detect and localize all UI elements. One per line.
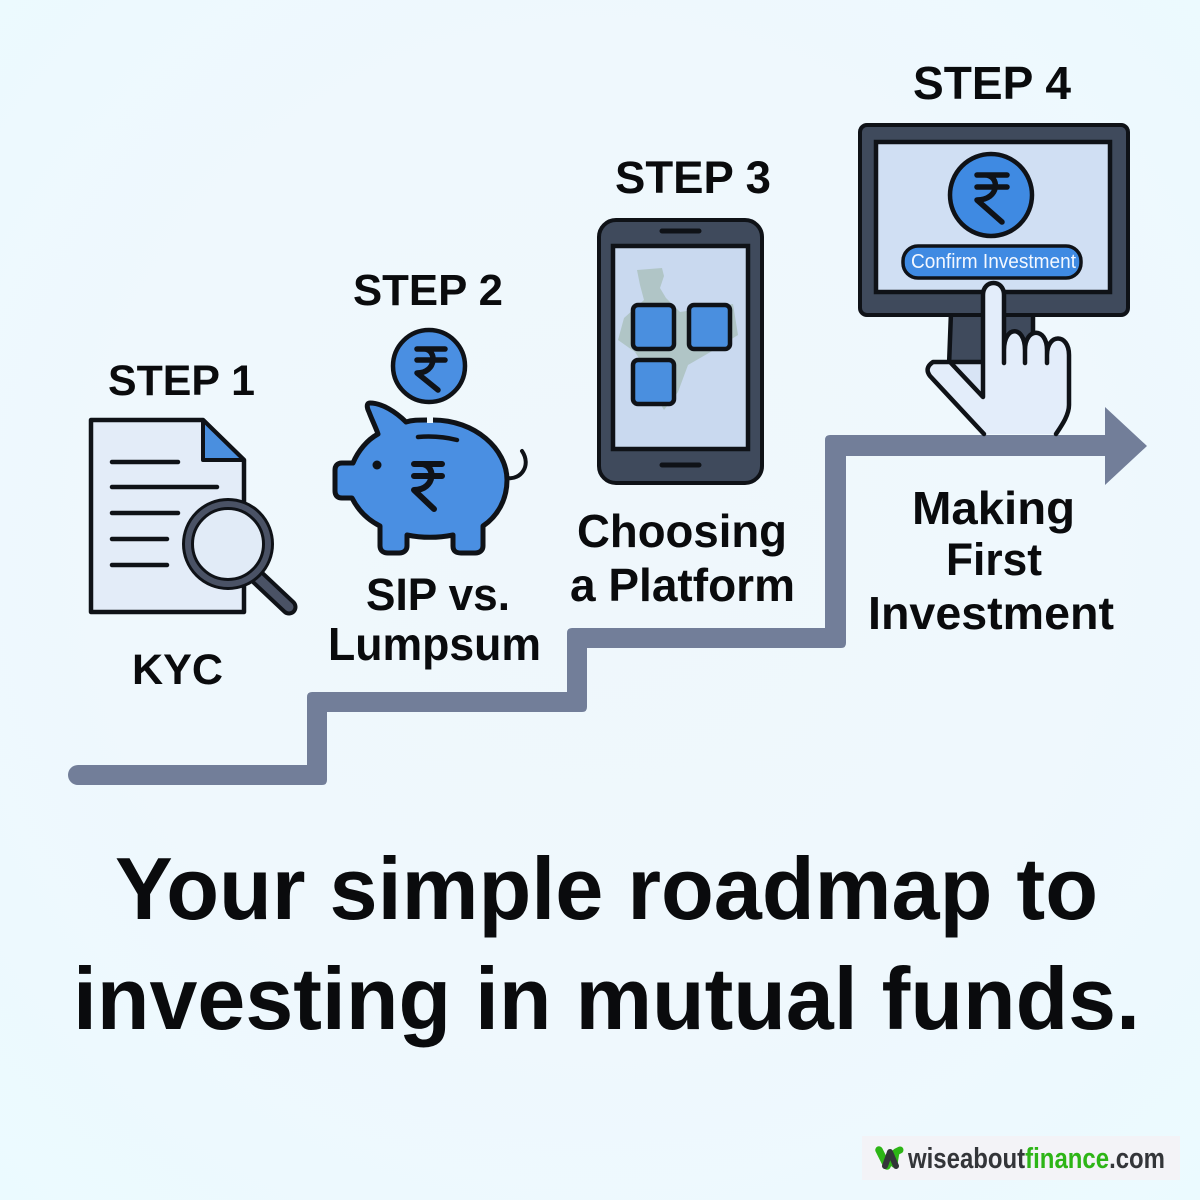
heading: step 3: STEP 3: [615, 152, 771, 203]
icon: pointing hand: [928, 283, 1069, 434]
label: SIP vs. Lumpsum: [328, 569, 541, 670]
heading: step 4: STEP 4: [913, 57, 1071, 109]
title: Your simple roadmap to: [115, 839, 1098, 938]
step 4: making first investment: [860, 57, 1128, 639]
heading: step 1: STEP 1: [108, 357, 255, 405]
label: making first investment: [868, 482, 1114, 639]
icon: document with magnifying glass: [91, 420, 289, 612]
label: making first investment: First: [946, 534, 1042, 585]
step 2: SIP vs lumpsum: [328, 266, 541, 670]
label: SIP vs. Lumpsum: SIP vs.: [366, 569, 510, 620]
staircase arrow: [68, 407, 1147, 785]
icon: monitor with confirm button: Confirm Investment: [911, 251, 1076, 273]
icon: smartphone with app tiles: [599, 220, 762, 483]
label: choosing a platform: [570, 505, 795, 611]
logo: wiseaboutfinance.com: wiseaboutfinance.com: [907, 1143, 1165, 1175]
icon: piggy bank: [335, 403, 526, 553]
label: KYC: KYC: [132, 646, 223, 694]
step 3: choosing a platform: [570, 152, 795, 611]
icon: monitor with confirm button: [860, 125, 1128, 366]
title: [73, 839, 1140, 1048]
icon: rupee coin: [393, 330, 465, 402]
label: choosing a platform: Choosing: [577, 505, 787, 557]
label: choosing a platform: a Platform: [570, 559, 795, 611]
heading: step 2: STEP 2: [353, 266, 503, 315]
label: making first investment: Investment: [868, 587, 1114, 639]
step 1: KYC: [91, 357, 289, 694]
title: investing in mutual funds.: [73, 949, 1140, 1048]
logo: wiseaboutfinance.com: [862, 1136, 1180, 1180]
label: SIP vs. Lumpsum: Lumpsum: [328, 618, 541, 670]
label: making first investment: Making: [912, 482, 1075, 534]
